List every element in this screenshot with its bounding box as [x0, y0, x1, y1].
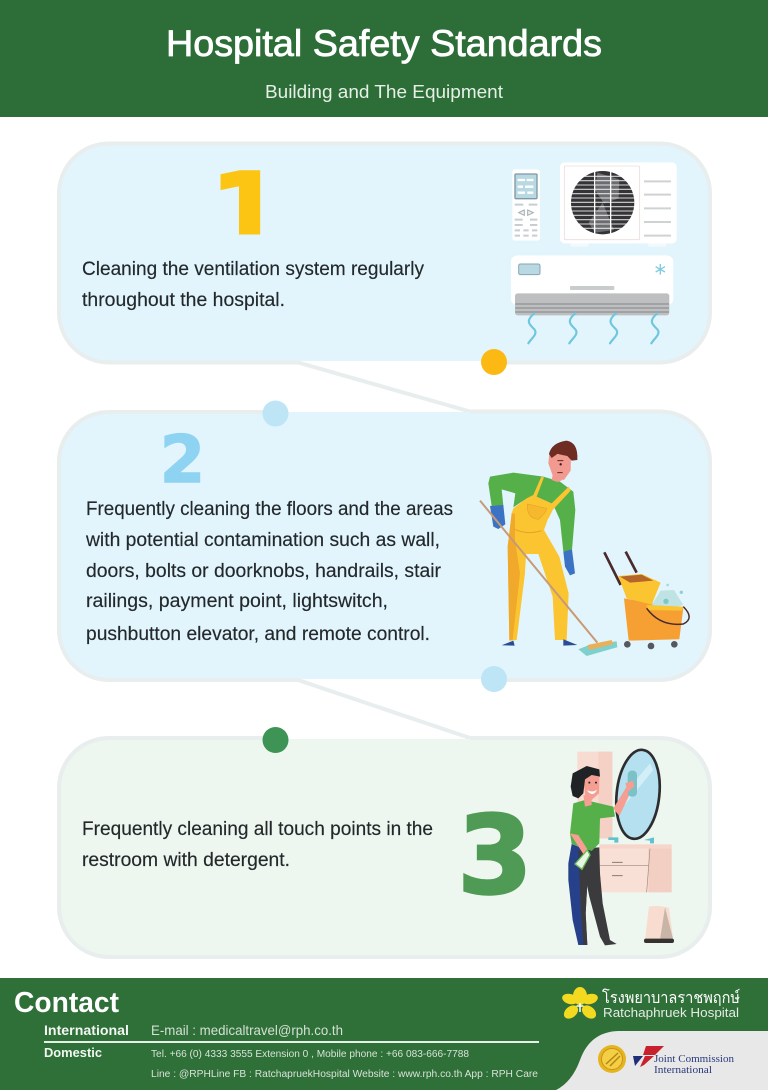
icon: bucket	[604, 552, 689, 649]
panel: step 3 restroom	[59, 738, 710, 957]
icon: gold seal	[598, 1045, 626, 1073]
icon: cold air waves	[528, 313, 658, 343]
title: Hospital Safety Standards	[166, 23, 602, 64]
joint commission name	[654, 1054, 734, 1076]
contact details: E-mail : medicaltravel@rph.co.th	[151, 1022, 343, 1038]
icon: indoor unit	[511, 255, 673, 315]
icon: bathroom fixtures	[577, 748, 674, 943]
subtitle: Building and The Equipment	[265, 82, 503, 102]
step 1 text: throughout the hospital.	[82, 290, 285, 311]
step 2 text: pushbutton elevator, and remote control.	[86, 624, 430, 645]
hospital name	[602, 988, 740, 1020]
step 1 text: Cleaning the ventilation system regularly	[82, 259, 424, 280]
contact details: Line : @RPHLine FB : RatchapruekHospital Website : www.rph.co.th App : RPH Care	[151, 1069, 538, 1080]
icon: cleaner	[488, 441, 577, 646]
step 2 text: railings, payment point, lightswitch,	[86, 591, 388, 612]
marker: step 2 dot bottom	[481, 666, 507, 692]
icon: man mopping with bucket	[480, 441, 689, 656]
step 2 text: doors, bolts or doorknobs, handrails, stair	[86, 561, 442, 582]
accreditation background	[556, 1031, 768, 1090]
footer heading: Contact	[14, 987, 119, 1019]
joint commission name: International	[654, 1065, 712, 1076]
step 3 text: restroom with detergent.	[82, 850, 290, 871]
step 3 text	[82, 819, 433, 871]
icon: hospital flower logo	[561, 987, 599, 1021]
icon: remote control	[512, 169, 540, 241]
step 2 text	[85, 499, 453, 645]
number 2: 2	[160, 423, 205, 498]
footer: contact band	[0, 978, 768, 1090]
joint commission name: Joint Commission	[654, 1054, 734, 1065]
panel: step 2 floors and surfaces	[59, 412, 710, 738]
panel: step 1 ventilation	[59, 144, 710, 412]
contact details: Tel. +66 (0) 4333 3555 Extension 0 , Mobile phone : +66 083-666-7788	[151, 1049, 469, 1060]
marker: step 1 dot	[481, 349, 507, 375]
header banner	[0, 0, 768, 117]
marker: step 3 dot	[262, 727, 288, 753]
contact details: Domestic	[44, 1046, 102, 1060]
icon: outdoor unit	[560, 162, 677, 247]
hospital name: โรงพยาบาลราชพฤกษ์	[602, 988, 740, 1007]
step 2 text: Frequently cleaning the floors and the areas	[86, 499, 453, 520]
number 3: 3	[457, 794, 533, 919]
contact details: International	[44, 1023, 129, 1038]
icon: woman cleaning mirror	[568, 748, 674, 945]
number 1: 1	[209, 151, 285, 276]
icon: mop	[480, 501, 617, 656]
step 2 text: with potential contamination such as wall,	[85, 530, 440, 551]
hospital name: Ratchaphruek Hospital	[603, 1005, 739, 1020]
marker: step 2 dot top	[262, 400, 288, 426]
step 3 text: Frequently cleaning all touch points in the	[82, 819, 433, 840]
icon: air conditioner units and remote	[511, 162, 677, 343]
icon: joint commission logo	[633, 1046, 664, 1067]
icon: cleaner woman	[568, 766, 637, 945]
step 1 text	[82, 259, 424, 311]
contact details	[44, 1022, 539, 1080]
